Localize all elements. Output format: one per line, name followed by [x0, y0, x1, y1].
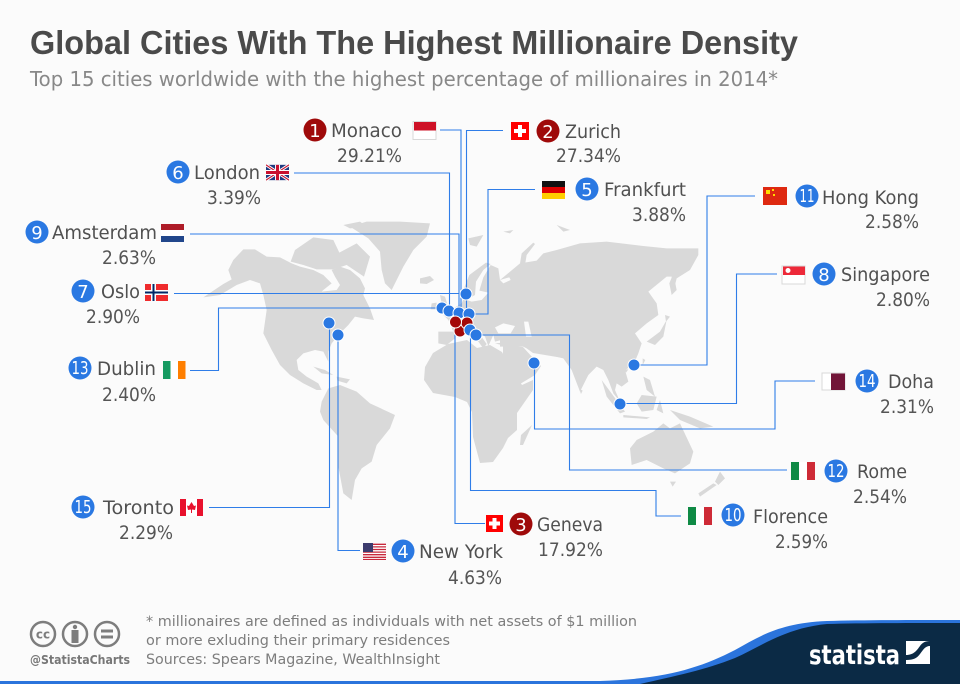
label: New York: New York — [419, 541, 503, 563]
footnote and sources: Sources: Spears Magazine, WealthInsight — [146, 652, 440, 668]
label: Frankfurt — [542, 178, 686, 226]
label: Toronto — [72, 496, 203, 544]
icon: creative commons — [31, 622, 119, 646]
handle: @StatistaCharts — [30, 653, 130, 667]
statista logo: statista — [809, 640, 900, 671]
label: Dublin: Dublin — [97, 358, 156, 380]
label: New York: 4.63% — [448, 567, 502, 589]
label: Doha: 2.31% — [880, 396, 934, 418]
label: Zurich: 2 — [542, 122, 554, 143]
label: London: 3.39% — [207, 187, 261, 209]
label: Florence: 10 — [724, 505, 742, 526]
label: Geneva — [486, 512, 603, 561]
label: Rome — [791, 460, 907, 508]
label: Doha: 14 — [858, 371, 876, 392]
label: New York: 4 — [397, 542, 409, 563]
label: Singapore: 2.80% — [876, 289, 930, 311]
label: London — [166, 160, 289, 209]
icon: creative commons: cc — [36, 628, 50, 642]
label: Amsterdam: Amsterdam — [52, 222, 157, 244]
footnote and sources: * millionaires are defined as individuals with net assets of $1 million — [146, 614, 637, 630]
label: London: London — [194, 162, 260, 184]
label: Rome: 2.54% — [853, 486, 907, 508]
label: Monaco: 1 — [309, 121, 321, 142]
label: Rome: Rome — [857, 461, 907, 483]
label: New York — [363, 540, 503, 589]
connector lines — [174, 130, 815, 550]
label: Florence: 2.59% — [775, 531, 828, 553]
label: Monaco: Monaco — [331, 120, 402, 142]
label: Dublin: 2.40% — [102, 384, 156, 406]
label: Frankfurt: 3.88% — [632, 204, 686, 226]
label: Geneva: 3 — [515, 515, 527, 536]
label: Geneva: 17.92% — [538, 539, 603, 561]
label: Amsterdam — [26, 220, 184, 269]
label: London: 6 — [172, 163, 184, 184]
label: Florence — [688, 504, 828, 553]
world map — [203, 222, 725, 500]
subtitle: Top 15 cities worldwide with the highest percentage of millionaires in 2014* — [29, 67, 778, 91]
label: Zurich: 27.34% — [556, 145, 621, 167]
label: Dublin — [68, 356, 186, 406]
label: Oslo: 2.90% — [86, 306, 140, 328]
label: Oslo: 7 — [77, 282, 89, 303]
label: Hong Kong: 2.58% — [865, 211, 919, 233]
city markers — [323, 288, 640, 410]
label: Frankfurt: 5 — [581, 180, 593, 201]
footer band — [0, 620, 960, 684]
label: Zurich: Zurich — [565, 121, 621, 143]
label: Monaco — [304, 118, 436, 167]
label: Zurich — [511, 120, 621, 167]
label: Doha — [822, 370, 934, 418]
label: Frankfurt: Frankfurt — [604, 179, 686, 201]
label: Amsterdam: 9 — [31, 223, 43, 244]
label: Singapore: Singapore — [841, 264, 930, 286]
label: Dublin: 13 — [72, 358, 88, 379]
footnote and sources: or more exluding their primary residences — [146, 633, 450, 649]
inland seas — [495, 277, 532, 337]
title: Global Cities With The Highest Millionaire Density — [30, 24, 799, 61]
label: Hong Kong: 11 — [800, 186, 814, 207]
label: Singapore: 8 — [818, 265, 830, 286]
label: Singapore — [782, 262, 930, 311]
label: Oslo — [72, 280, 168, 328]
label: Hong Kong — [763, 184, 919, 233]
footnote and sources — [146, 614, 637, 668]
label: Geneva: Geneva — [537, 514, 603, 536]
label: Hong Kong: Hong Kong — [822, 187, 919, 209]
label: Monaco: 29.21% — [337, 145, 402, 167]
label: Rome: 12 — [828, 461, 844, 482]
label: Toronto: 2.29% — [119, 522, 173, 544]
label: Florence: Florence — [753, 506, 828, 528]
label: Toronto: Toronto — [102, 497, 174, 519]
label: Doha: Doha — [888, 371, 934, 393]
label: Toronto: 15 — [74, 497, 92, 518]
label: Amsterdam: 2.63% — [102, 247, 156, 269]
label: Oslo: Oslo — [101, 281, 140, 303]
